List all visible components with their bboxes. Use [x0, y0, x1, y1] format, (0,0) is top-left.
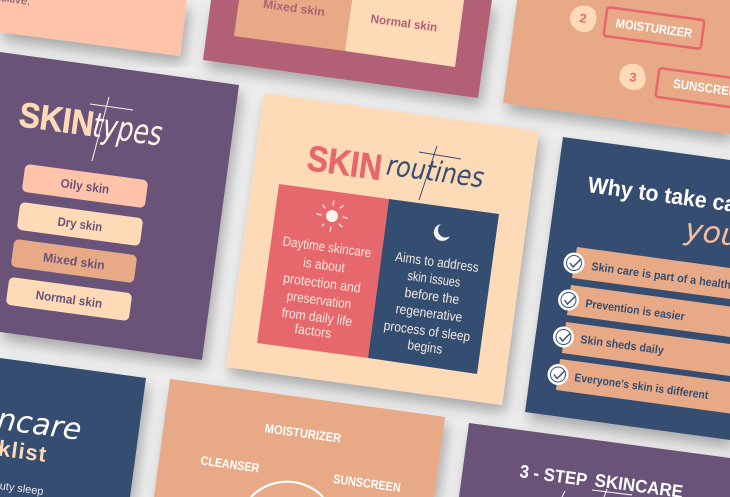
panel: peach card top left — [0, 0, 187, 56]
panel: daytime — [257, 184, 389, 358]
pill: dry skin — [17, 202, 143, 246]
text: nighttime description: Aims to address — [394, 249, 480, 275]
text: nighttime description: regenerative — [395, 301, 463, 325]
heading: 3-step skincare: 3 - STEP — [518, 461, 589, 490]
pill: oily skin — [22, 164, 148, 208]
heading: skin types — [17, 95, 165, 161]
list item 3: Skin sheds daily — [580, 334, 665, 357]
pill: normal skin: Normal skin — [35, 288, 103, 311]
heading: skin routines: routines — [385, 149, 486, 195]
icon: sun — [317, 201, 347, 231]
panel: orange steps card top right — [503, 0, 730, 134]
step 3 sunscreen: 3 — [629, 70, 637, 85]
text: daytime description: preservation — [286, 288, 352, 312]
panel: nighttime — [368, 199, 499, 374]
text: nighttime description: skin issues — [407, 268, 461, 290]
heading: skin types: types — [90, 106, 165, 155]
pill: normal skin — [6, 277, 132, 321]
panel: navy why take care card — [525, 137, 730, 440]
pill: mixed skin: Mixed skin — [42, 250, 106, 273]
text: daytime description — [281, 234, 372, 341]
list item 2 — [558, 285, 730, 337]
tile: mixed skin — [234, 0, 352, 51]
panel: skin routines center card — [226, 93, 539, 405]
step 2 moisturizer: MOISTURIZER — [615, 16, 693, 41]
pill: mixed skin — [11, 239, 137, 283]
text: daytime description: protection and — [282, 270, 362, 296]
text: daytime description: Daytime skincare — [282, 234, 372, 260]
heading: 3-step skincare — [518, 461, 684, 497]
list item 1 — [564, 247, 730, 299]
text: nighttime description: process of sleep — [383, 318, 471, 344]
text: daytime description: is about — [302, 255, 346, 275]
text: nighttime description — [383, 249, 480, 357]
step 2 moisturizer: 2 — [579, 11, 587, 26]
list item 4: Everyone's skin is different — [574, 372, 709, 402]
list item 2: Prevention is easier — [585, 298, 686, 323]
panel: purple 3-step card bottom right — [459, 423, 730, 497]
tile: normal skin — [345, 0, 464, 67]
step 3 sunscreen — [619, 64, 730, 110]
step 2 moisturizer — [570, 6, 705, 49]
panel: navy checklist card bottom left — [0, 358, 146, 497]
label: moisturizer: MOISTURIZER — [264, 421, 342, 446]
text: daytime description: factors — [294, 321, 333, 341]
icon: moon — [434, 224, 450, 241]
panel: rose skin type card — [203, 0, 492, 98]
panel: orange wheel card bottom — [154, 379, 445, 497]
label: sunscreen: SUNSCREEN — [332, 472, 402, 495]
heading: skin types: SKIN — [17, 95, 96, 144]
pill: oily skin: Oily skin — [60, 176, 110, 197]
panel: purple skin types card — [0, 52, 239, 360]
list item 3 — [553, 322, 730, 376]
list item 4 — [548, 359, 730, 414]
label: cleanser: CLEANSER — [200, 454, 260, 475]
text: nighttime description: before the — [404, 285, 460, 307]
pill: dry skin: Dry skin — [57, 215, 103, 234]
heading: skin routines: SKIN — [305, 137, 385, 188]
tile: normal skin: Normal skin — [370, 12, 438, 34]
text: daytime description: from daily life — [281, 305, 353, 329]
chart: wheel outline — [251, 482, 323, 497]
heading: skin routines — [305, 137, 486, 200]
text: nighttime description: begins — [407, 337, 444, 357]
